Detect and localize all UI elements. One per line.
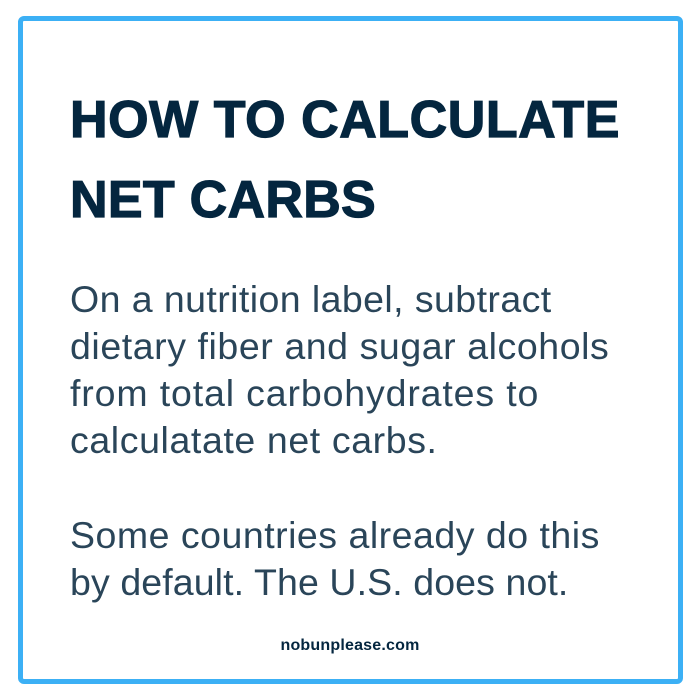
body paragraph: countries: Some countries already do this xyxy=(70,514,600,556)
body paragraph: countries xyxy=(70,514,600,603)
body paragraph: how to subtract: On a nutrition label, subtract xyxy=(70,278,552,320)
title: NET CARBS xyxy=(70,171,376,229)
body paragraph: how to subtract: calculatate net carbs. xyxy=(70,419,438,461)
body paragraph: how to subtract: from total carbohydrates to xyxy=(70,372,539,414)
body paragraph: how to subtract xyxy=(70,278,609,461)
footer website: nobunplease.com xyxy=(280,637,420,654)
body paragraph: countries: by default. The U.S. does not. xyxy=(70,561,568,603)
title: HOW TO CALCULATE xyxy=(70,91,620,149)
title xyxy=(70,91,620,229)
body paragraph: how to subtract: dietary fiber and sugar alcohols xyxy=(70,325,609,367)
